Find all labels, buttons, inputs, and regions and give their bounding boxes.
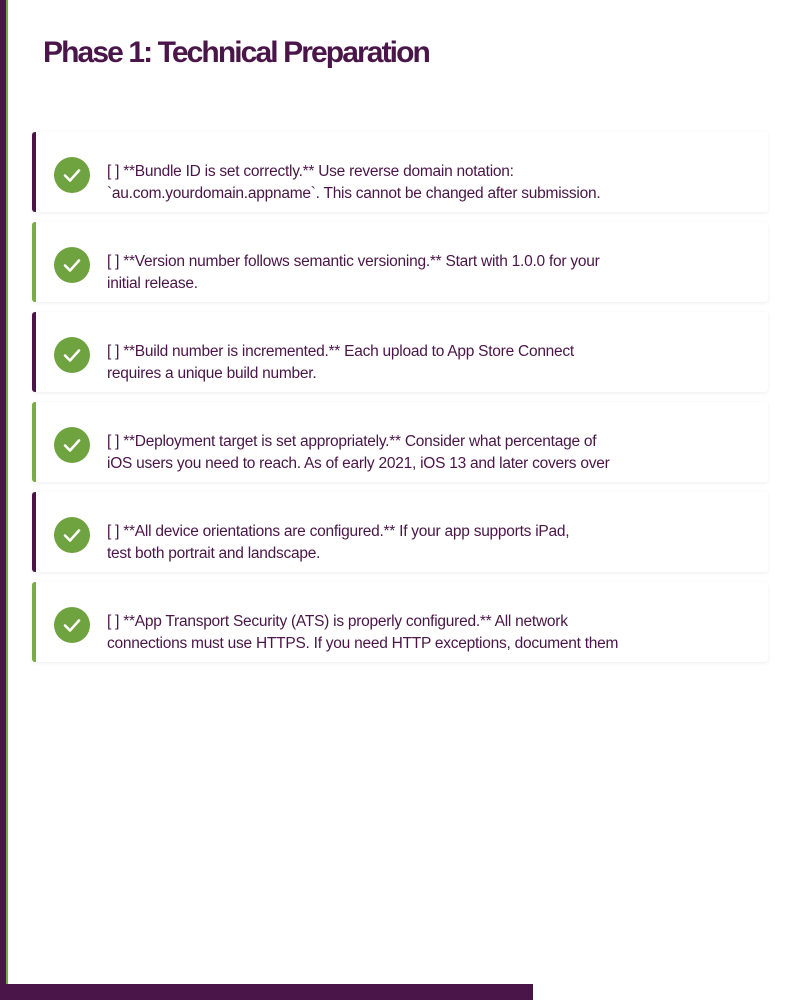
- text: [107, 613, 618, 652]
- text: test both portrait and landscape.: [107, 545, 320, 562]
- text: initial release.: [107, 275, 198, 292]
- icon: check: [54, 247, 90, 283]
- text: [107, 433, 610, 472]
- icon: check: [54, 427, 90, 463]
- card 4: [32, 402, 768, 482]
- text: [ ] **Bundle ID is set correctly.** Use reverse domain notation:: [107, 163, 514, 180]
- icon: check: [54, 607, 90, 643]
- text: [ ] **Version number follows semantic versioning.** Start with 1.0.0 for your: [107, 253, 600, 270]
- text: [ ] **Deployment target is set appropriately.** Consider what percentage of: [107, 433, 596, 450]
- icon: check: [54, 517, 90, 553]
- icon: check: [54, 337, 90, 373]
- card 2: [32, 222, 768, 302]
- text: iOS users you need to reach. As of early 2021, iOS 13 and later covers over: [107, 455, 610, 472]
- text: [ ] **Build number is incremented.** Each upload to App Store Connect: [107, 343, 574, 360]
- icon: check: [54, 157, 90, 193]
- text: [107, 523, 569, 562]
- title: Phase 1: Technical Preparation: [43, 36, 429, 69]
- text: connections must use HTTPS. If you need HTTP exceptions, document them: [107, 635, 618, 652]
- text: [107, 253, 600, 292]
- text: [107, 163, 600, 202]
- text: [ ] **All device orientations are configured.** If your app supports iPad,: [107, 523, 569, 540]
- card 6: [32, 582, 768, 662]
- text: `au.com.yourdomain.appname`. This cannot be changed after submission.: [107, 185, 600, 202]
- text: [107, 343, 574, 382]
- text: [ ] **App Transport Security (ATS) is properly configured.** All network: [107, 613, 568, 630]
- card 3: [32, 312, 768, 392]
- card 1: [32, 132, 768, 212]
- card 5: [32, 492, 768, 572]
- text: requires a unique build number.: [107, 365, 316, 382]
